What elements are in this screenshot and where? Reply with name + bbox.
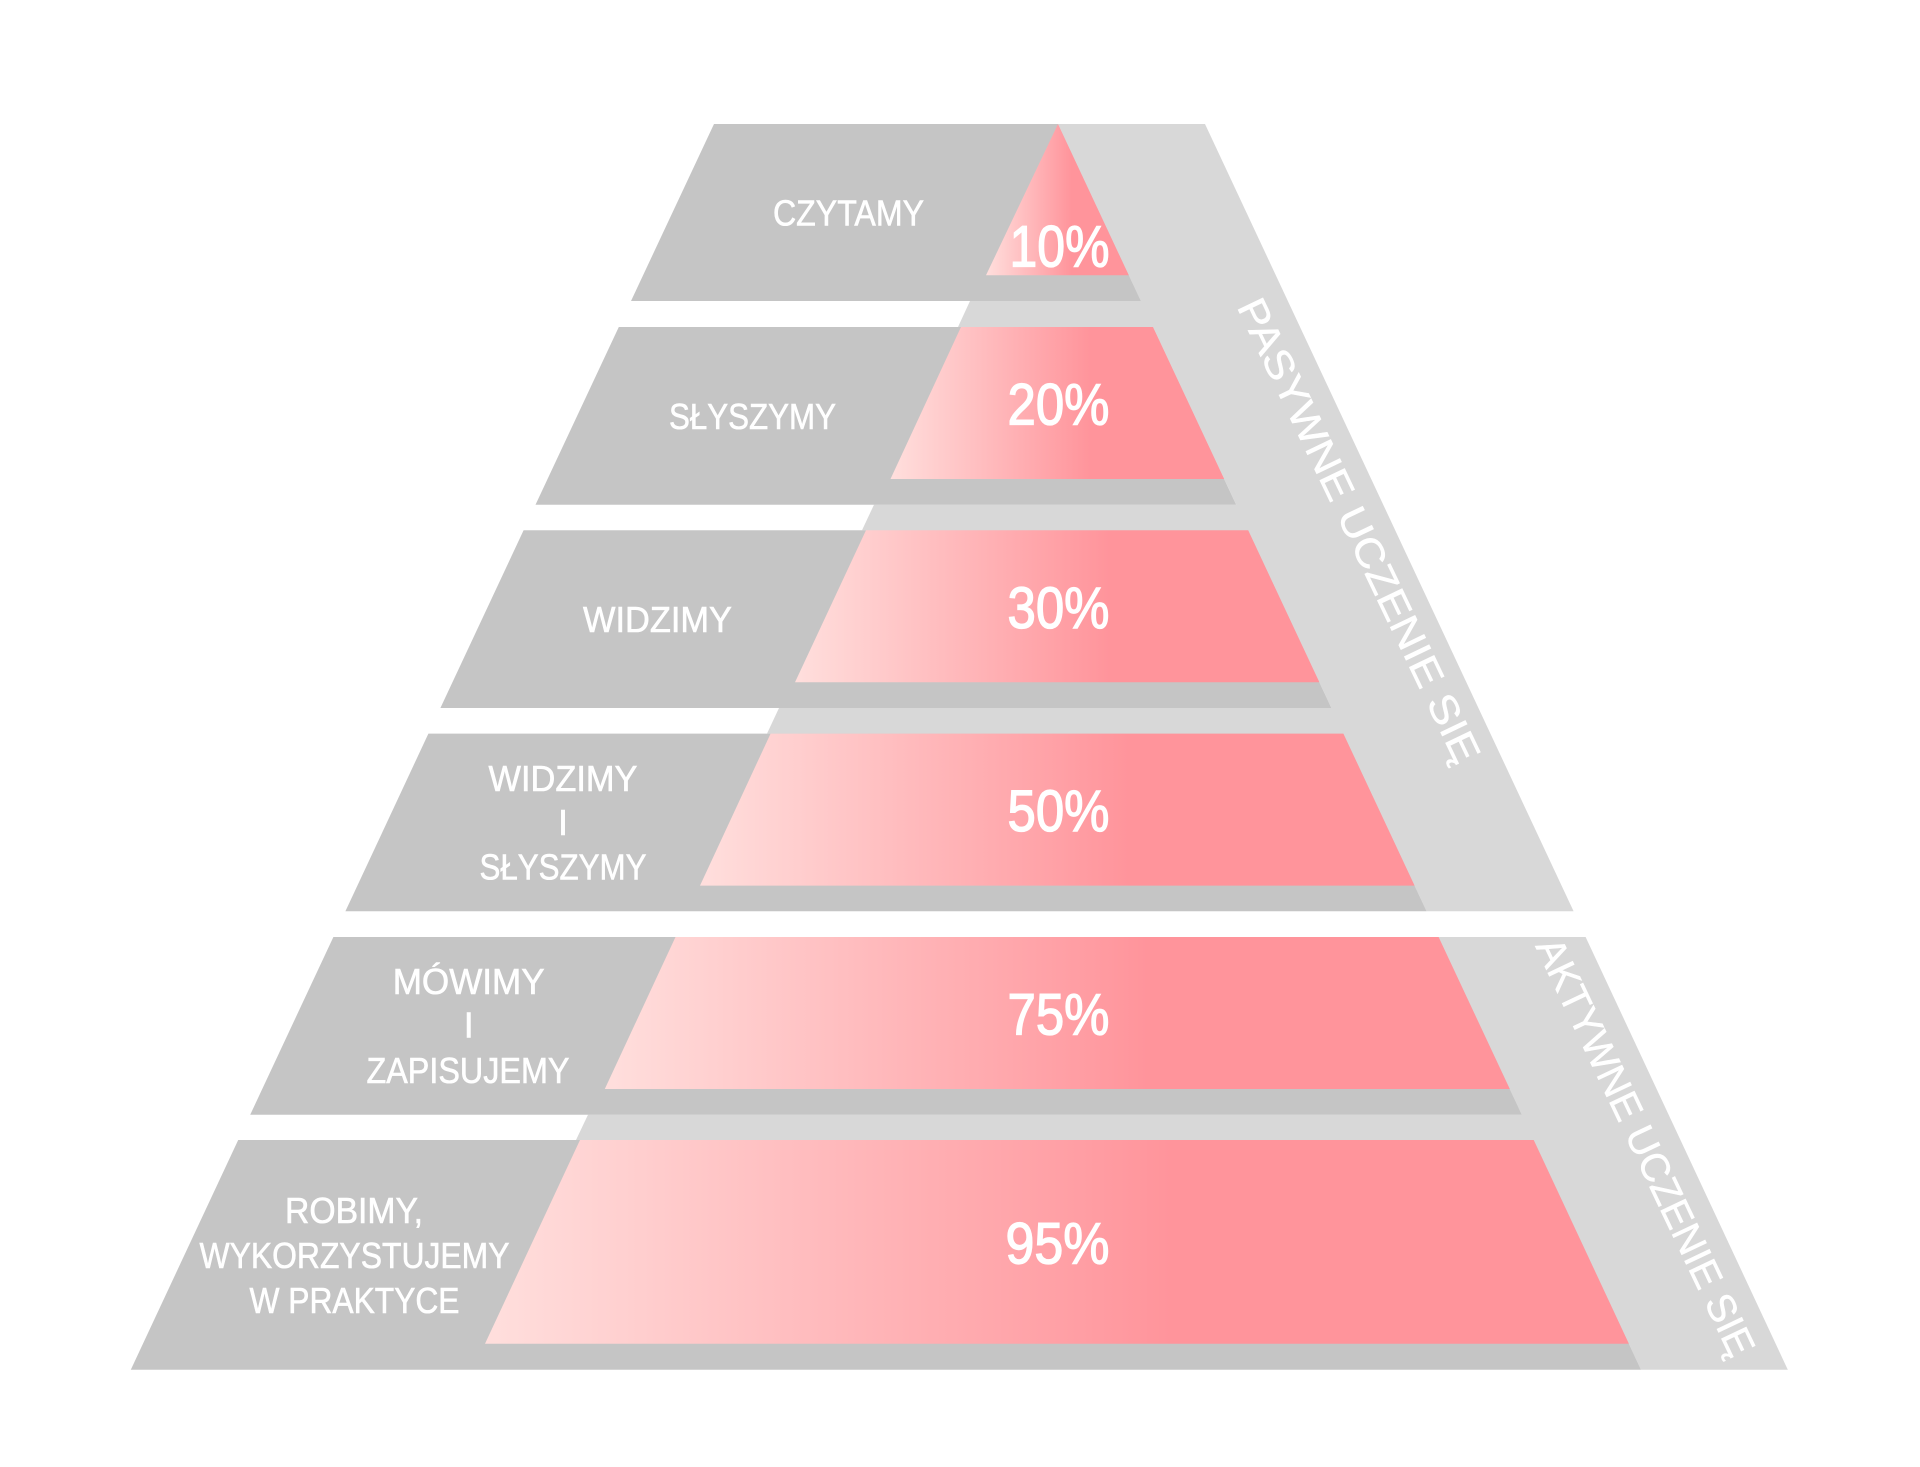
label: robimy, wykorzystujemy w praktyce: W PRAKTYCE <box>250 1280 460 1321</box>
tier 4: seeing and hearing <box>345 734 1427 911</box>
value: 30%: 30% <box>1008 576 1110 641</box>
label: mówimy i zapisujemy: MÓWIMY <box>393 961 545 1002</box>
label: mówimy i zapisujemy: ZAPISUJEMY <box>366 1050 570 1091</box>
tier 2: hearing <box>536 327 1236 505</box>
tier 5: speaking and writing <box>250 937 1522 1115</box>
label: widzimy i słyszymy: WIDZIMY <box>488 758 638 799</box>
side label: passive learning: PASYWNE UCZENIE SIĘ <box>1228 291 1488 770</box>
label: widzimy i słyszymy: SŁYSZYMY <box>480 846 646 888</box>
value: 50%: 50% <box>1008 779 1110 844</box>
label: mówimy i zapisujemy <box>366 961 570 1091</box>
band: active learning <box>576 931 1788 1370</box>
label: słyszymy: SŁYSZYMY <box>669 396 836 437</box>
tier 3: seeing <box>440 530 1331 708</box>
label: robimy, wykorzystujemy w praktyce <box>200 1190 510 1321</box>
label: widzimy: WIDZIMY <box>583 599 732 640</box>
value: 75%: 75% <box>1008 982 1110 1048</box>
label: widzimy i słyszymy <box>480 758 646 888</box>
tier 1: reading <box>631 124 1141 301</box>
label: robimy, wykorzystujemy w praktyce: ROBIMY, <box>285 1190 423 1231</box>
value: 10%: 10% <box>1010 214 1110 280</box>
label: robimy, wykorzystujemy w praktyce: WYKORZYSTUJEMY <box>200 1235 510 1276</box>
label: widzimy i słyszymy: I <box>558 802 568 843</box>
band: passive learning <box>767 124 1574 911</box>
tier 6: doing and applying <box>131 1140 1641 1370</box>
label: mówimy i zapisujemy: I <box>464 1004 474 1046</box>
value: 20%: 20% <box>1008 372 1110 438</box>
value: 95%: 95% <box>1006 1212 1110 1276</box>
label: czytamy: CZYTAMY <box>773 192 924 234</box>
side label: active learning: AKTYWNE UCZENIE SIĘ <box>1527 931 1763 1364</box>
